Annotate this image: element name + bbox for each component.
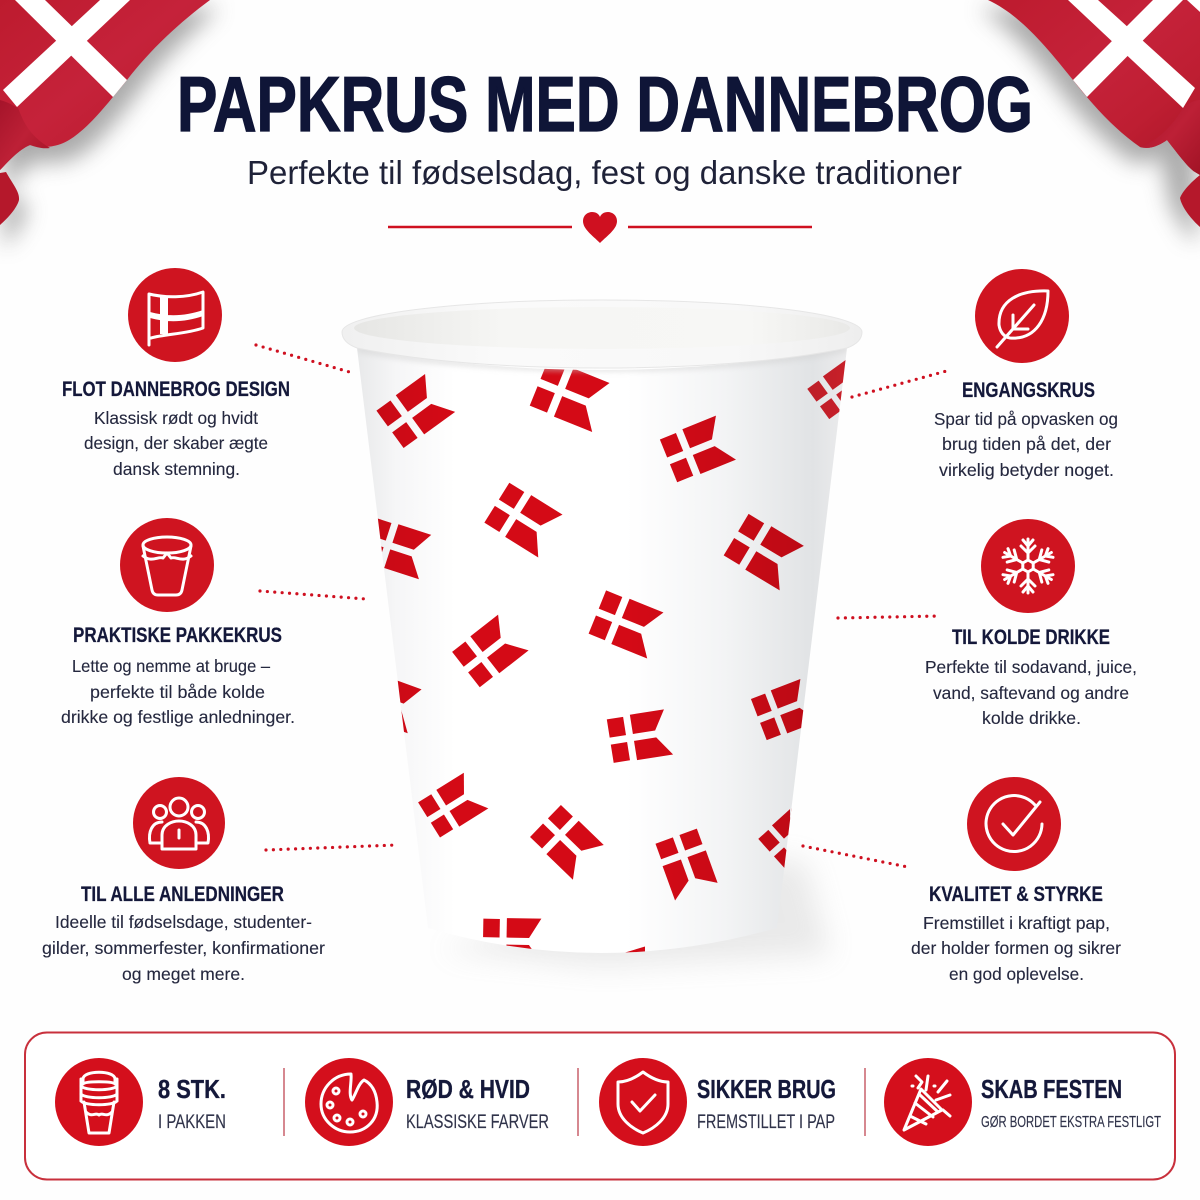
body text: gilder, sommerfester, konfirmationer xyxy=(42,938,325,958)
heading: KVALITET & STYRKE xyxy=(929,883,1103,906)
heading: ENGANGSKRUS xyxy=(962,379,1095,402)
cup rim xyxy=(342,300,862,368)
body text xyxy=(925,657,1137,728)
icon: cup stack xyxy=(55,1058,143,1146)
body text: en god oplevelse. xyxy=(949,964,1084,984)
feature: Flot Dannebrog design xyxy=(62,268,290,479)
feature: Praktiske pakkekrus xyxy=(61,518,295,727)
body text: virkelig betyder noget. xyxy=(939,460,1114,480)
icon: check ring xyxy=(967,777,1061,871)
heading: FLOT DANNEBROG DESIGN xyxy=(62,378,290,401)
flag pattern on cup xyxy=(376,360,846,952)
body text: Fremstillet i kraftigt pap, xyxy=(923,913,1110,933)
body text: Perfekte til sodavand, juice, xyxy=(925,657,1137,677)
body text: Klassisk rødt og hvidt xyxy=(94,408,258,428)
sublabel: KLASSISKE FARVER xyxy=(406,1112,549,1133)
icon: cup xyxy=(120,518,214,612)
item: Skab festen xyxy=(884,1058,1161,1146)
body text: Lette og nemme at bruge – xyxy=(72,656,270,676)
ribbon: top right Danish flag xyxy=(979,0,1200,240)
cup body xyxy=(357,348,847,953)
icon: palette xyxy=(305,1058,393,1146)
body text xyxy=(84,408,268,479)
subtitle: Perfekte til fødselsdag, fest og danske traditioner xyxy=(247,154,962,191)
body text: perfekte til både kolde xyxy=(90,682,265,702)
body text xyxy=(934,409,1118,480)
body text: design, der skaber ægte xyxy=(84,433,268,453)
body text: Ideelle til fødselsdage, studenter- xyxy=(55,912,312,932)
paper cup with flag pattern xyxy=(342,300,871,966)
body text: der holder formen og sikrer xyxy=(911,938,1121,958)
body text xyxy=(61,656,295,727)
ribbon: top left Danish flag xyxy=(0,0,219,248)
icon: flag xyxy=(128,268,222,362)
dotted connector lines xyxy=(256,345,950,867)
divider with heart xyxy=(388,212,812,243)
icon: leaf xyxy=(975,269,1069,363)
feature: Kvalitet og styrke xyxy=(911,777,1121,984)
body text: brug tiden på det, der xyxy=(942,434,1111,454)
label: SKAB FESTEN xyxy=(981,1074,1122,1104)
label: 8 STK. xyxy=(158,1074,226,1104)
body text: Spar tid på opvasken og xyxy=(934,409,1118,429)
rim shadow on cup xyxy=(357,349,847,369)
cup shading xyxy=(357,348,847,953)
body text: dansk stemning. xyxy=(113,459,240,479)
icon: snowflake xyxy=(981,519,1075,613)
body text xyxy=(42,912,325,984)
icon: party popper xyxy=(884,1058,972,1146)
icon: people xyxy=(133,777,225,869)
sublabel: FREMSTILLET I PAP xyxy=(697,1112,835,1133)
label: SIKKER BRUG xyxy=(697,1074,836,1104)
heading: TIL ALLE ANLEDNINGER xyxy=(81,883,284,906)
feature: Til alle anledninger xyxy=(42,777,325,984)
heading: TIL KOLDE DRIKKE xyxy=(952,626,1110,649)
bottom info panel xyxy=(25,1032,1175,1180)
body text: drikke og festlige anledninger. xyxy=(61,707,295,727)
body text: og meget mere. xyxy=(122,964,245,984)
feature: Engangskrus xyxy=(934,269,1118,480)
cup opening xyxy=(354,307,850,349)
cup shadow xyxy=(440,860,830,966)
body text: vand, saftevand og andre xyxy=(933,683,1129,703)
feature: Til kolde drikke xyxy=(925,519,1137,728)
item: Sikker brug xyxy=(599,1058,836,1146)
item: 8 stk xyxy=(55,1058,226,1146)
body text: kolde drikke. xyxy=(982,708,1081,728)
sublabel: I PAKKEN xyxy=(158,1112,226,1133)
label: RØD & HVID xyxy=(406,1074,530,1104)
item: Rød & hvid xyxy=(305,1058,549,1146)
icon: shield xyxy=(599,1058,687,1146)
body text xyxy=(911,913,1121,984)
heading: PRAKTISKE PAKKEKRUS xyxy=(73,624,282,647)
